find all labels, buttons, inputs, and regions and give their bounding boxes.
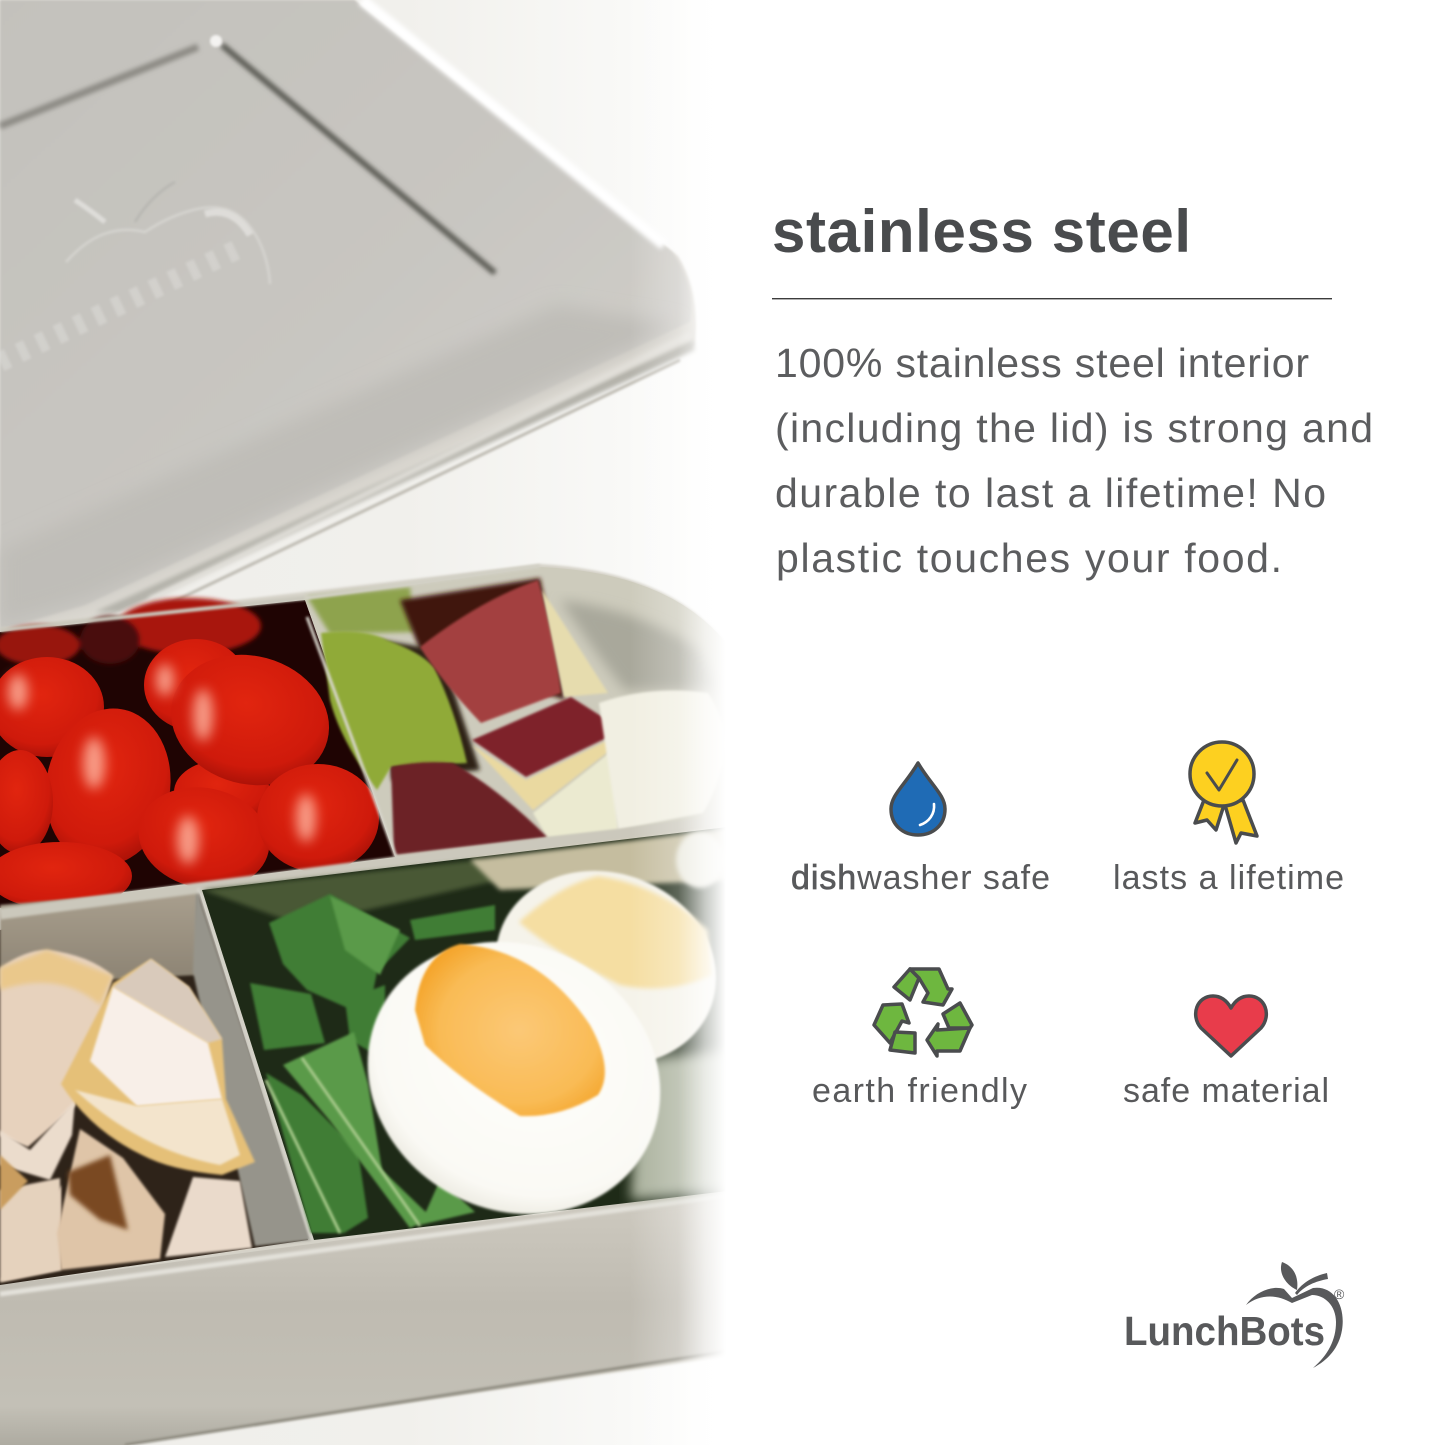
compartment: chicken bbox=[0, 888, 311, 1285]
faded greens right of eggs bbox=[630, 1050, 736, 1200]
body paragraph: (including the lid) is strong and bbox=[775, 405, 1373, 451]
icon: water drop bbox=[891, 763, 945, 835]
logo: LunchBots bbox=[1124, 1262, 1345, 1368]
compartment: tomatoes bbox=[0, 598, 396, 910]
icon: award ribbon bbox=[1190, 742, 1257, 843]
table surface bbox=[0, 0, 735, 1445]
embossed logo on lid bbox=[0, 182, 270, 362]
heading divider bbox=[772, 298, 1332, 299]
label: dishwasher safe bbox=[791, 859, 1050, 897]
heading: stainless steel bbox=[772, 198, 1191, 265]
icon: recycle arrows bbox=[874, 969, 972, 1056]
logo apple mark bbox=[1246, 1262, 1343, 1368]
front egg bbox=[320, 891, 708, 1265]
feature: earth friendly bbox=[812, 969, 1027, 1110]
feature: dishwasher safe bbox=[791, 763, 1050, 897]
compartment: salad and eggs bbox=[202, 826, 744, 1265]
label: lasts a lifetime bbox=[1113, 859, 1344, 897]
body paragraph: durable to last a lifetime! No bbox=[775, 470, 1326, 516]
feature: safe material bbox=[1123, 996, 1329, 1110]
body paragraph: plastic touches your food. bbox=[776, 535, 1282, 581]
icon: heart bbox=[1196, 996, 1266, 1056]
photo: stainless steel lunch box with food bbox=[0, 0, 766, 1445]
white cover right of the fade bbox=[726, 0, 766, 1445]
body paragraph: 100% stainless steel interior bbox=[775, 340, 1309, 386]
lid of the lunch box bbox=[0, 0, 696, 640]
white fade of photo into page bbox=[630, 0, 726, 1445]
box body and rim bbox=[0, 564, 736, 1445]
divider walls between compartments bbox=[0, 820, 735, 1240]
rear egg bbox=[468, 840, 744, 1096]
feature: lasts a lifetime bbox=[1113, 742, 1344, 897]
body paragraph bbox=[775, 340, 1373, 581]
logo wordmark: LunchBots bbox=[1124, 1308, 1325, 1354]
logo registered mark: ® bbox=[1334, 1286, 1345, 1302]
label: safe material bbox=[1123, 1072, 1329, 1110]
label: earth friendly bbox=[812, 1072, 1027, 1110]
compartment: apples bbox=[305, 566, 735, 857]
small egg at back bbox=[676, 832, 724, 888]
